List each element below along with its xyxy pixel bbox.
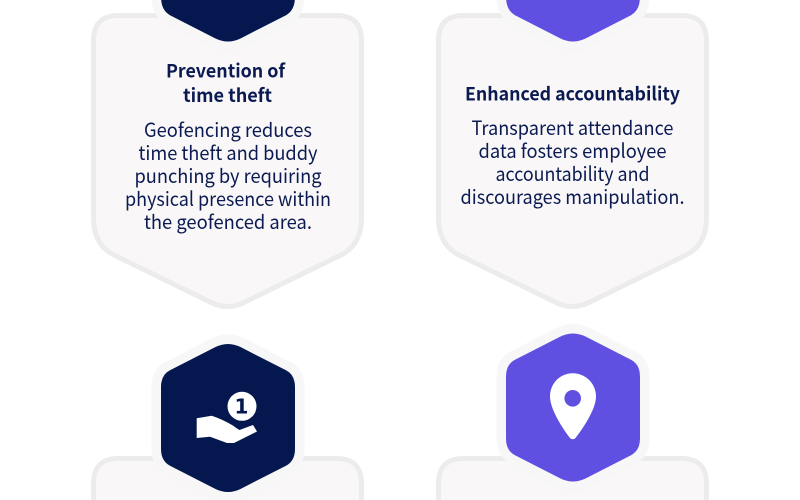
heading: prevention of time theft: Prevention of xyxy=(166,58,286,84)
text: prevention description: time theft and buddy xyxy=(138,137,318,166)
text: accountability description xyxy=(460,112,684,210)
panel: lower right card xyxy=(438,458,706,500)
heading: prevention of time theft xyxy=(166,58,286,108)
icon: purple hexagon top right xyxy=(506,0,640,42)
text: prevention description: physical presence within xyxy=(125,183,331,212)
icon: coin xyxy=(228,392,256,421)
heading: enhanced accountability: Enhanced accountability xyxy=(465,80,680,106)
icon: pin xyxy=(550,373,596,439)
icon: location pin in purple hexagon xyxy=(506,334,640,482)
panel: enhanced accountability xyxy=(438,16,706,306)
text: prevention description xyxy=(125,114,331,235)
icon: hand xyxy=(197,416,257,443)
text: prevention description: the geofenced area. xyxy=(144,206,312,235)
heading: prevention of time theft: time theft xyxy=(183,82,272,108)
text: prevention description: Geofencing reduces xyxy=(144,114,312,143)
text: accountability description: accountability and xyxy=(496,158,650,187)
panel: lower left card xyxy=(94,458,362,500)
icon: hand holding coin in navy hexagon xyxy=(161,344,295,492)
icon: coin number: 1 xyxy=(235,394,248,418)
text: accountability description: discourages manipulation. xyxy=(460,181,684,210)
text: accountability description: Transparent attendance xyxy=(472,112,674,141)
text: accountability description: data fosters employee xyxy=(478,135,666,164)
text: prevention description: punching by requiring xyxy=(134,160,322,189)
panel: prevention of time theft xyxy=(94,16,362,306)
icon: navy hexagon top left xyxy=(161,0,295,42)
